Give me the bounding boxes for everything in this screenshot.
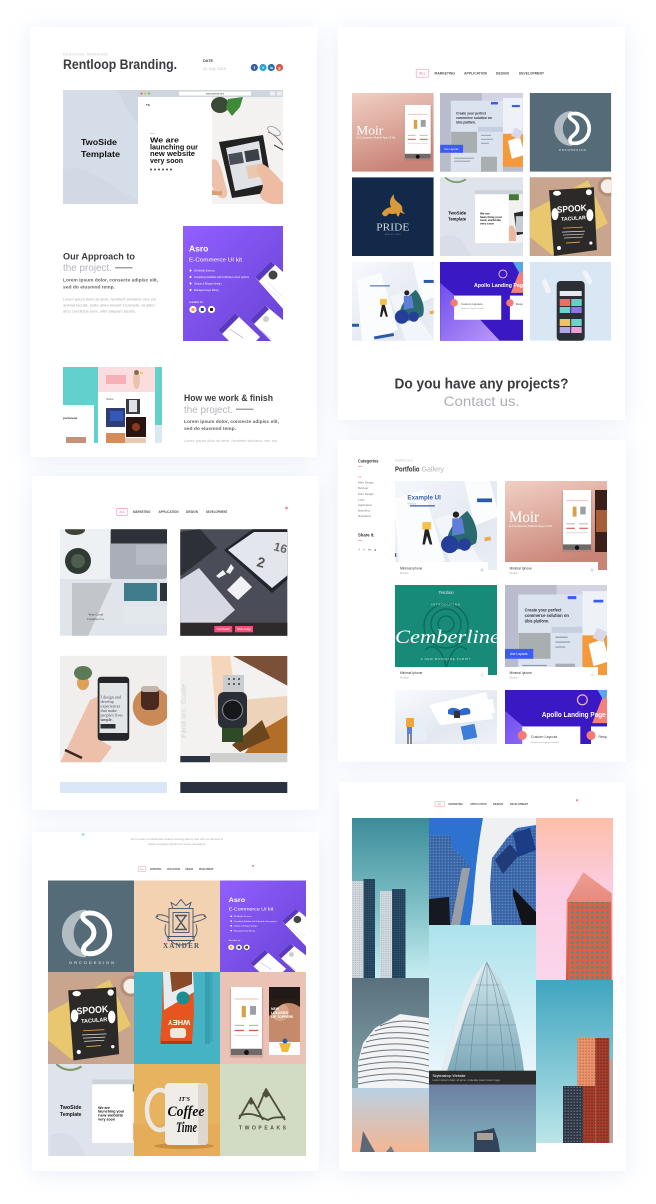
tile: Spooktacular flyer: SPOOK [76,1004,109,1017]
tile: TwoSide template: new website [480,218,501,222]
tile: Apollo landing page: Easy-to-use layouts included [461,307,484,310]
text block: how we work: Lorem ipsum dolor sit amet, hendrerit similarlor met, est [184,439,277,443]
caption bar: website title [429,1071,536,1084]
tile: Example UI [352,262,434,341]
sidebar: share: t [364,548,365,552]
tile: commerce landing page [440,93,523,172]
filter navigation: APPLICATION [470,803,487,806]
template preview collage: portscene [63,416,78,420]
caption: Mockup [400,676,409,680]
tile: Asro UI kit: Completely Editable with Unlimited colour options [234,920,277,923]
caption [505,562,598,578]
tile: TwoSide template: new website [98,1114,123,1118]
photo: AirPods and devices: 2 [255,553,267,571]
caption: Minimal Iphone [510,566,532,570]
tile: TwoSide template [48,1064,134,1156]
promo: Asro UI kit: E-Commerce UI kit [189,258,243,264]
filter navigation: APPLICATION [464,72,488,76]
tile: Pride logo [352,177,434,256]
tile: Moir: E-Commerce Mobile App UI Kit [356,136,396,139]
date block: 20 July, 2019 [203,67,226,71]
tile: Spooktacular flyer [530,177,612,256]
promo: Asro UI kit: Asro [189,244,208,254]
filter navigation: DESIGN [186,868,193,871]
hero image: TwoSide template: Template [81,149,120,159]
social share icons: g [278,66,281,70]
caption [395,667,488,683]
filter navigation: ALL [419,72,426,76]
tile: Cemberline font: Cemberline [395,627,500,648]
filter navigation [435,802,528,806]
sidebar: categories: Application [358,503,373,507]
tile: Xander crest: XANDER [163,942,200,950]
tile: Moir [352,93,434,172]
panel: case study page [30,27,317,457]
promo: Asro UI kit: Managed Layer library [194,289,220,292]
caption: Minimal Iphone [400,566,423,570]
tile: Asro UI kit: 85 Mobile Screens [234,916,252,918]
hero image: TwoSide template: very soon [150,158,183,165]
panel: architecture mosaic [339,782,626,1171]
photo: buildings at sunset [352,1088,429,1152]
text block: our approach [63,252,158,314]
tile: Moir [505,481,607,570]
photo: hand holding phone: simple. [100,717,113,722]
photo: hand holding phone: people's lives [100,712,123,718]
promo: Asro UI kit: 85 Mobile Screens [194,270,215,272]
filter navigation: DEVELOPMENT [199,868,214,871]
caption: Minimal Iphone [510,671,532,675]
social share icons: f [254,65,256,70]
tile: Moir phones [220,972,306,1064]
tile: Apollo landing page [440,262,526,341]
gallery heading: Gallery [422,466,444,474]
tile: protein bar [134,972,220,1064]
filter navigation: MARKETING [434,72,455,76]
tile: TwoPeaks logo [220,1064,306,1156]
tile: Apollo landing page: Resp [516,302,523,306]
tile: TwoSide template: TwoSide [448,211,467,216]
social share icons [251,64,283,71]
sidebar: share [358,532,376,552]
tile: Asro UI kit [220,880,306,972]
tile: Orco Design: ORCODESIGN [69,960,114,965]
hero image: TwoSide template: www.website.com [206,93,224,96]
tile: Apollo landing page: Apollo Landing Page [542,712,606,719]
tile: TwoSide template: We are [480,212,490,216]
text block: our approach: arcu condictus eum, nibh aliquam iaculis. [63,310,136,314]
decorative dot marker [252,865,254,867]
tablet photo [211,97,283,204]
photo: AirPods and devices [180,529,289,636]
decorative dot marker [285,507,288,509]
photo: laptop and stationery [60,529,167,636]
tile: coffee mug [134,1064,220,1156]
tile: commerce landing page: commerce solution on [525,613,569,619]
tile: Orco Design logo: ORCODESIGN [559,148,586,152]
hero image: TwoSide template: TS [146,103,150,107]
contact heading: Do you have any projects? [394,376,569,392]
caption [505,667,598,683]
tile: protein bar: WHEY [168,1018,190,1027]
tile: Asro UI kit: Available for: [229,939,241,942]
gallery heading [395,458,444,474]
photo: twin towers [352,818,429,978]
social share icons: t [262,65,264,70]
sidebar: categories: Logo [358,498,365,502]
tile: Cemberline font [395,585,500,675]
tile: coffee mug: Coffee [168,1104,205,1120]
tile: Asro UI kit: Managed Layer library [234,930,256,932]
sidebar: categories [358,458,379,518]
promo: Asro UI kit: Completely Editable with Unlimited colour options [194,276,250,279]
tile: commerce landing page [505,585,607,675]
gallery heading: PORTFOLIO [395,458,414,462]
hero image: TwoSide template: TwoSide [81,137,117,147]
photo: red brick tower on teal [536,980,613,1143]
photo: smart watch: Fand Inc. Guide [181,684,188,738]
photo: AirPods and devices: Share Image [237,628,252,631]
text block: our approach: animal iaculis. Iusto aliea nearet incompto. Id aliter [63,304,156,308]
text block: our approach: sed do eiusmod temp. [63,284,115,290]
tile: TwoSide template: very soon [98,1117,115,1121]
decorative dot marker [82,833,84,836]
tile: Apollo landing page: Resp [598,735,607,739]
text block: how we work: the project. [184,405,233,416]
tile: Pride logo: PRIDE [376,222,409,233]
caption bar: website title: Lorem ipsum dolor sit amet, molestie quam lorem fuga. [432,1079,501,1082]
caption: Mockup [510,676,519,680]
filter navigation: APPLICATION [158,510,179,514]
tile: Spooktacular flyer: TACULAR [81,1017,108,1025]
tile: Xander crest [134,880,220,972]
sidebar: categories: Categories [358,458,379,464]
photo: laptop and stationery: Creative Co. [87,617,104,621]
photo: glass dome tower [429,925,536,1071]
filter navigation: MARKETING [133,510,151,514]
hero image: TwoSide template: About [150,132,156,135]
tile: commerce landing page: Use Layouts [444,147,459,151]
tile: commerce landing page: Ubis platform. [456,119,476,124]
caption [395,562,488,578]
filter navigation: ALL [119,510,125,514]
tile: TwoSide template: launching your [480,215,503,219]
tile: coffee mug: IT'S [178,1097,191,1103]
filter navigation [416,69,545,77]
photo: hand holding phone: experiences [100,704,121,708]
contact heading [394,376,569,409]
photo: hand holding phone: that make [100,708,117,713]
tile: TwoSide template: Template [60,1112,81,1118]
tile: Spooktacular flyer [48,972,134,1064]
promo: Asro UI kit: Unique & Elegant design [194,282,222,286]
photo: AirPods and devices: 16 [272,539,289,556]
filter navigation [117,508,228,516]
photo: tower top in steel sky [429,1084,536,1152]
filter navigation: ALL [438,803,442,806]
tile: Pride logo: SINCE 1983 [385,234,401,236]
tile: TwoSide template: Template [448,217,467,222]
panel: portfolio grid with contact [338,27,625,420]
hero image: TwoSide template: new website [150,151,195,158]
tile: TwoSide template: very soon [480,221,494,225]
photo: hand holding phone [60,656,167,762]
sidebar: categories: Print Design [358,492,374,496]
partial photo rows [60,782,287,793]
text block: how we work: Lorem ipsum dolor, consecte adipisc elit, [184,419,279,424]
tile: Moir: Moir [356,122,384,137]
date block: DATE [203,59,214,63]
tile: phone on blue [530,262,611,341]
gallery heading: Portfolio [395,466,420,474]
caption: Minimal Iphone [400,671,423,675]
promo: Asro UI kit [183,226,283,341]
social share icons: in [270,66,273,70]
sidebar: categories: Mockup [358,486,369,490]
promo: Asro UI kit: Available for: [189,301,204,304]
filter navigation: DEVELOPMENT [206,510,228,514]
filter navigation: DEVELOPMENT [519,72,545,76]
text block: our approach: Lorem ipsum dolor sit amet, hendrerit similarlor met, est [63,298,156,302]
filter navigation: DESIGN [496,72,510,76]
tile: UI illustration [395,690,497,744]
decorative dot marker [576,799,578,802]
photo: AirPods and devices: View Details [217,628,231,631]
tile: commerce landing page: Create your perfect [456,110,487,115]
filter navigation [138,866,214,872]
intro text [131,837,223,846]
tile: Apollo landing page: Apollo Landing Page [474,283,526,289]
tile: Example UI: Mockup [407,503,417,506]
photo: coral tower on pink [536,818,613,980]
intro text: deliver engaging digital commerce campaigns. [148,842,206,846]
tile: Apollo landing page: Easy-to-use layouts included [531,741,560,744]
template preview collage [63,367,162,443]
tile: coffee mug: Time [176,1120,197,1136]
tile: Spooktacular flyer: SPOOK [557,203,588,215]
caption bar: website title: Skyteashop Website [432,1073,466,1078]
tile: Apollo landing page: Custom Layouts [531,735,558,739]
date block [203,59,226,71]
filter navigation: DEVELOPMENT [510,803,528,806]
tile: TwoSide template: launching your [98,1110,125,1114]
photo: white curved building [352,978,429,1088]
filter navigation: MARKETING [150,868,162,871]
photo: hand holding phone: develop [100,699,114,704]
sidebar: share: in [368,548,371,552]
panel: portfolio gallery with sidebar [338,440,626,762]
tile: TwoSide template: We are [98,1106,110,1110]
template preview collage: Hubba [106,398,114,401]
tile: Example UI [395,481,497,570]
tile: Moir phones: LUXURIES [271,1011,289,1015]
tile: Moir phones: LIP TOPPERS [271,1015,294,1019]
text block: our approach: the project. [63,263,112,274]
tile: TwoSide template: TwoSide [60,1105,81,1111]
tile: commerce landing page: Ubis platform. [525,619,550,625]
photo: laptop and stationery: Very Good [88,612,103,616]
sidebar: share: f [358,548,360,552]
tile: commerce landing page: commerce solution on [456,115,492,120]
sidebar: categories: Illustration [358,514,372,518]
sidebar: categories: Web Design [358,480,374,484]
filter navigation: APPLICATION [167,868,180,871]
tile: Orco Design logo [530,93,612,172]
intro text: From a team of passionate creators working side by side with our partners to [131,837,223,841]
photo: smart watch [180,656,288,762]
tile: Asro UI kit: Unique & Elegant design [234,925,258,928]
tile: Cemberline font: INTRODUCING [431,602,461,606]
photo: hand holding phone: I design and [100,694,122,700]
tile: Asro UI kit: Asro [229,897,246,904]
sidebar: share: g [374,548,376,552]
sidebar: categories: Branding [358,508,370,512]
panel: masonry portfolio grid [32,832,319,1171]
text block: our approach: Our Approach to [63,252,136,262]
text block: how we work: How we work & finish [184,393,273,403]
category label: REDESIGN, BRANDING [63,52,108,56]
filter navigation: DESIGN [493,803,503,806]
hero image: TwoSide template: We are [150,138,179,144]
text block: how we work: sed do eiusmod temp. [184,426,236,431]
tile: Example UI: Example UI [407,495,441,502]
tile: Asro UI kit: E-Commerce UI kit [229,907,274,912]
tile: Cemberline font: A NEW MONOLINE SCRIPT [421,657,471,661]
contact heading: Contact us. [444,393,520,409]
tile: Moir phones: NEW [271,1007,280,1011]
tile: Moir: Moir [509,509,540,526]
sidebar: share: Share It. [358,532,375,538]
tile: TwoPeaks logo: TWOPEAKS [239,1126,287,1132]
text block: our approach: Lorem ipsum dolor, consecte adipisc elit, [63,278,158,282]
filter navigation: ALL [140,868,145,871]
caption: Mockup [400,572,409,575]
hero image: TwoSide template [63,90,283,204]
caption: Mockup [510,572,519,575]
tile: Apollo landing page: Custom Layouts [461,302,483,306]
title: Rentloop Branding. [63,57,177,72]
filter navigation: MARKETING [448,803,463,806]
sidebar: categories: All [358,475,362,479]
filter navigation: DESIGN [186,510,199,514]
tile: commerce landing page: Use Layouts [510,652,528,656]
tile: commerce landing page: Create your perfect [525,607,562,613]
tile: Spooktacular flyer: TACULAR [561,215,586,223]
text block: how we work [184,393,279,443]
tile: Moir: E-Commerce Mobile App UI Kit [509,524,552,528]
photo: glass buildings and clouds [429,818,536,925]
tile: TwoSide template [440,177,523,256]
tile: Apollo landing page [505,690,607,744]
tile: Orco Design [48,880,134,972]
hero image: TwoSide template: launching our [150,144,198,152]
tile: Cemberline font: Ternbon [438,590,454,595]
panel: photo grid [32,476,319,810]
